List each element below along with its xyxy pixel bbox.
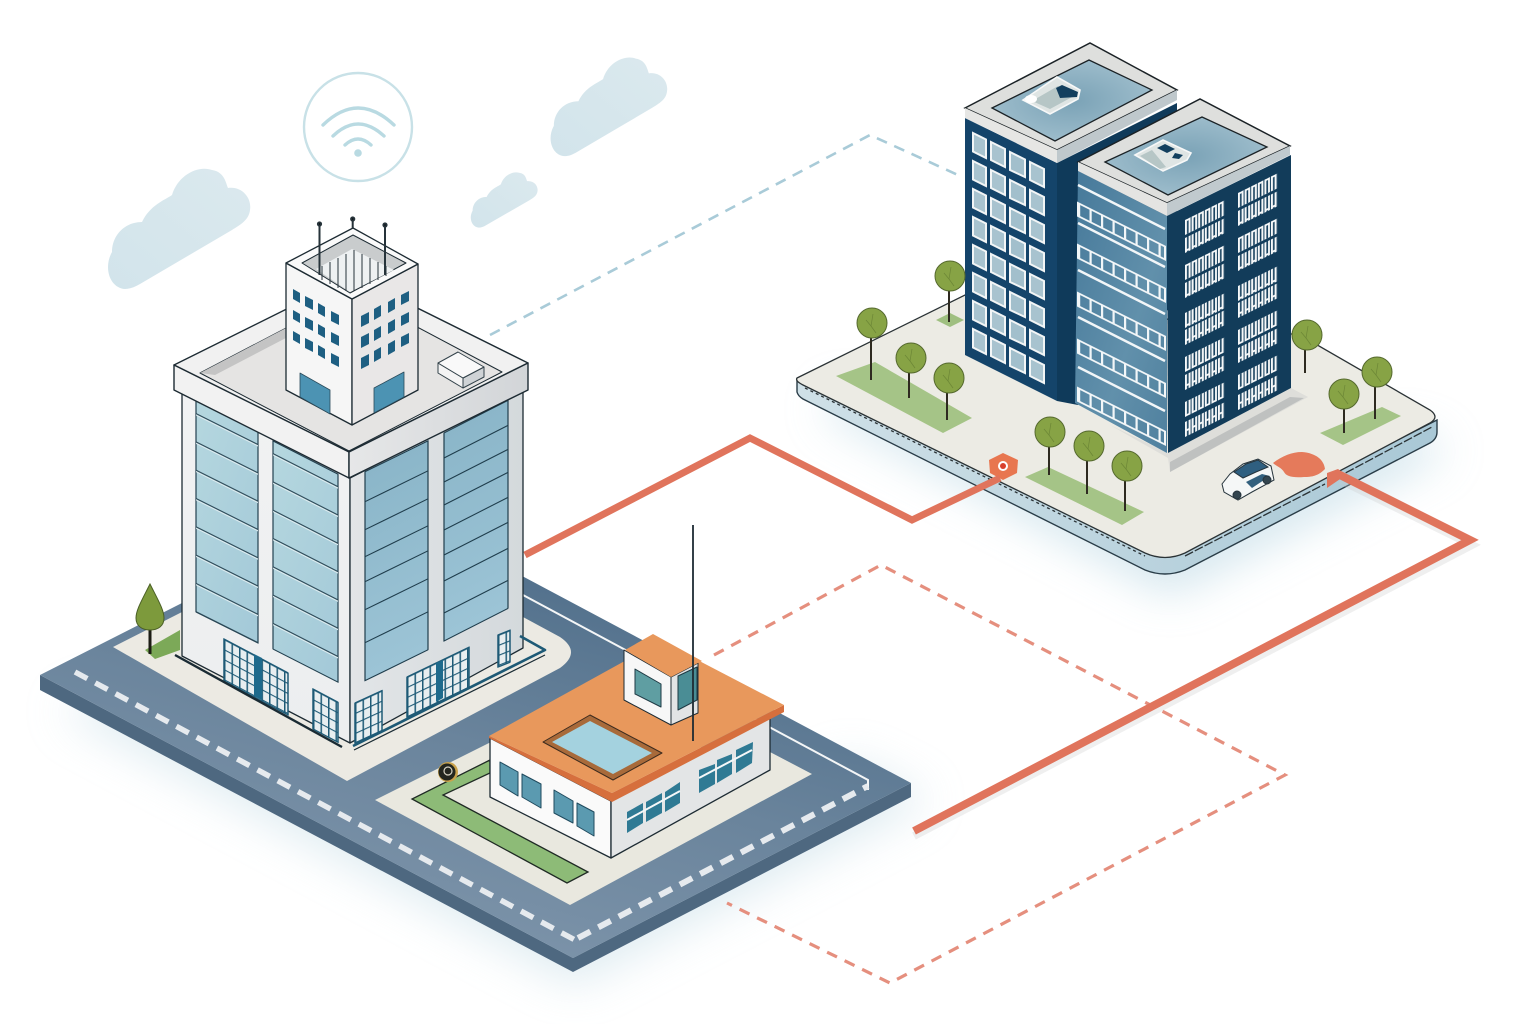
street block base: [40, 510, 911, 972]
roof: [489, 641, 784, 793]
network link: solid orange loop: [914, 469, 1472, 836]
parapet left: [174, 365, 349, 478]
building plinth: [1110, 388, 1308, 472]
sidewalk: small building plot: [375, 735, 812, 905]
right campus platform: [797, 295, 1437, 574]
low building with orange roof: [489, 525, 784, 858]
antennas: [318, 217, 387, 275]
wall left: [490, 738, 611, 858]
roof unit: front building: [1135, 140, 1191, 171]
lawn: right: [1320, 407, 1401, 445]
roof cube left: [624, 650, 671, 725]
orange arrival pad: [1273, 452, 1325, 477]
parapet right: [349, 363, 528, 478]
penthouse left face: [286, 263, 352, 425]
penthouse top: [286, 228, 418, 299]
navy building: rear: [965, 43, 1177, 405]
tower right face: [350, 390, 523, 743]
icon: wifi: [304, 73, 412, 181]
lawn and tree: tower plot: [136, 584, 180, 659]
network link: orange dashed: [714, 565, 1285, 983]
wall right: [611, 715, 770, 858]
rooftop box: [438, 352, 484, 388]
tower roof: [174, 276, 528, 452]
tower left face: [182, 390, 350, 743]
glazing column 4: [444, 400, 508, 641]
lawn: small building: [412, 760, 588, 883]
skylight: [543, 715, 662, 780]
roof cube window right: [678, 667, 697, 710]
icon: parking sign: [438, 762, 458, 782]
network link: blue dashed: [490, 135, 958, 335]
penthouse right face: [352, 264, 418, 425]
roof cube right: [671, 663, 698, 725]
lawn: small: [936, 313, 964, 327]
icon: orange marker: [989, 453, 1018, 480]
trees: right campus: [857, 261, 1392, 511]
cloud: small: [471, 172, 538, 228]
lawn: rear left: [836, 362, 972, 433]
lobby windows: [224, 630, 510, 743]
lawn: front: [1025, 467, 1144, 525]
cloud: left: [108, 169, 250, 289]
glazing column 2: [273, 441, 338, 682]
car: [1222, 459, 1274, 500]
roof unit: rear building: [1023, 77, 1080, 114]
roof deck: [200, 293, 502, 451]
roof cube window left: [635, 669, 661, 707]
skylight glass: [552, 721, 652, 774]
cloud: right: [551, 58, 667, 156]
penthouse doors: [300, 372, 404, 414]
right wall windows: [627, 742, 753, 833]
network link: solid orange to right campus: [525, 438, 1000, 555]
glazing column 1: [196, 401, 258, 643]
left wall windows: [500, 762, 594, 836]
base trim: [175, 636, 545, 750]
penthouse windows: [293, 289, 409, 369]
office tower: [174, 217, 545, 750]
glazing column 3: [365, 441, 428, 681]
steel-blue building: front: [1075, 99, 1291, 453]
penthouse court: [302, 235, 406, 293]
eave: [489, 705, 784, 802]
soft ground shadows: [60, 390, 1450, 985]
sidewalk: tower plot: [113, 612, 571, 781]
antenna pole: [692, 525, 694, 741]
roof cube top: [625, 634, 702, 677]
